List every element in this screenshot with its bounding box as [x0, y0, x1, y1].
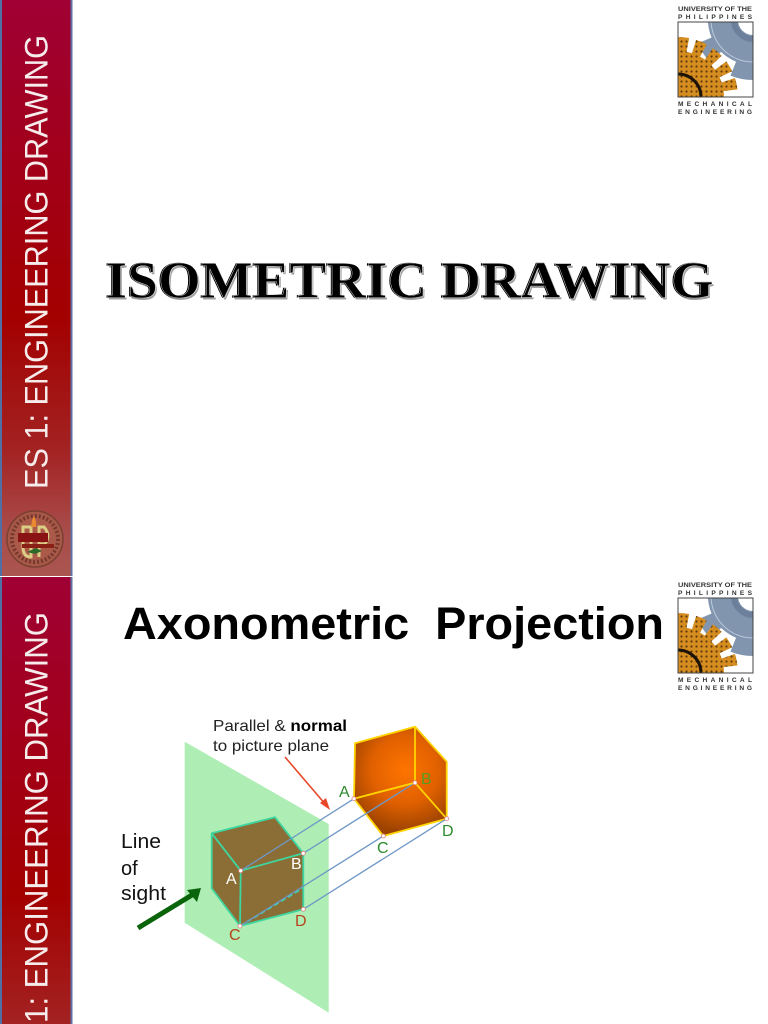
sidebar: slide 2 — [0, 577, 72, 1024]
logo: UP Mechanical Engineering, slide 2: ENGINEERING — [678, 685, 752, 692]
title: Isometric Drawing: ISOMETRIC DRAWING — [106, 252, 714, 310]
logo: UP Mechanical Engineering, slide 2: MECHANICAL — [678, 677, 752, 684]
logo: UP Mechanical Engineering, slide 1: ENGINEERING — [678, 109, 752, 116]
diagram: axonometric projection — [121, 718, 454, 1013]
logo: UP Mechanical Engineering, slide 1: MECHANICAL — [678, 101, 752, 108]
picture plane — [185, 742, 329, 1013]
vertex labels: B — [421, 771, 432, 788]
title: Isometric Drawing: ISOMETRIC DRAWING — [107, 254, 715, 312]
line of sight label: Line — [121, 831, 161, 853]
vertex labels: B — [291, 856, 302, 873]
title: Isometric Drawing: ISOMETRIC DRAWING — [105, 252, 713, 310]
projection lines — [240, 783, 447, 926]
vertex markers — [238, 781, 449, 928]
callout: parallel and normal: Parallel & normal — [213, 718, 347, 735]
vertex labels: A — [226, 871, 237, 888]
heading: Axonometric Projection: Axonometric Projection — [123, 598, 664, 649]
line of sight label — [121, 831, 166, 905]
back cube — [354, 727, 447, 836]
vertex labels: D — [295, 913, 307, 930]
sidebar title, cropped: 1: ENGINEERING DRAWING — [18, 612, 54, 1023]
icon: college seal — [7, 511, 63, 567]
front cube — [212, 817, 303, 926]
line of sight label: of — [121, 858, 138, 880]
arrow: line of sight — [138, 888, 201, 928]
vertex labels — [226, 771, 454, 944]
diagram: axonometric projection: to picture plane — [213, 738, 329, 755]
sidebar title: ES 1: ENGINEERING DRAWING — [18, 35, 54, 489]
vertex labels: A — [339, 784, 350, 801]
vertex labels: C — [377, 840, 389, 857]
logo: UP Mechanical Engineering, slide 2: PHILIPPINES — [678, 590, 753, 597]
arrow: callout pointer — [285, 757, 330, 810]
logo: UP Mechanical Engineering, slide 1 — [678, 6, 754, 114]
line of sight label: sight — [121, 883, 166, 905]
vertex labels: C — [229, 927, 241, 944]
logo: UP Mechanical Engineering, slide 2 — [678, 582, 754, 690]
logo: UP Mechanical Engineering, slide 2: UNIVERSITY OF THE — [678, 582, 753, 589]
sidebar: slide 1 — [0, 0, 72, 576]
vertex labels: D — [442, 823, 454, 840]
logo: UP Mechanical Engineering, slide 1: UNIVERSITY OF THE — [678, 6, 753, 13]
logo: UP Mechanical Engineering, slide 1: PHILIPPINES — [678, 14, 753, 21]
